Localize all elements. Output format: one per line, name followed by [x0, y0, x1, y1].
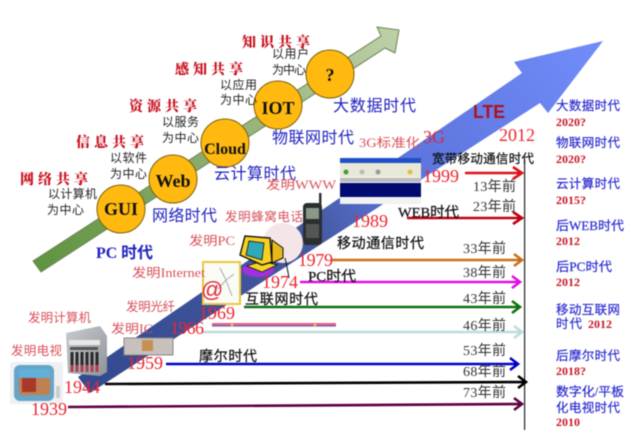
- year labels: 3G: [423, 127, 445, 147]
- timeline arrows: [68, 167, 526, 410]
- year labels: LTE: [473, 102, 505, 122]
- era names: PC时代: [308, 269, 356, 285]
- icon: television: [10, 362, 63, 404]
- years-ago labels: 73年前: [463, 384, 506, 401]
- blue era labels on the green arrow: [96, 97, 416, 262]
- blue era labels on the green arrow: 物联网时代: [272, 129, 354, 147]
- green sharing evolution arrow: [33, 27, 399, 272]
- year labels: 1939: [31, 399, 67, 419]
- year labels: 1969: [199, 303, 235, 323]
- node: Web: Web: [155, 171, 191, 191]
- era names: [199, 151, 534, 365]
- arrow: web era: [407, 212, 522, 224]
- invention labels: 发明光纤: [126, 299, 175, 314]
- icon: browser window: [340, 158, 421, 204]
- arrow: television era: [68, 398, 522, 410]
- invention labels: 发明电视: [11, 343, 62, 358]
- IC era bar: [212, 323, 336, 327]
- era names: 宽带移动通信时代: [432, 151, 534, 166]
- node: Cloud: Cloud: [204, 141, 246, 158]
- right column: future eras: 2012: [556, 275, 580, 289]
- years-ago labels: 46年前: [463, 317, 506, 334]
- sharing stage labels: 资源共享: [129, 98, 197, 115]
- years-ago labels: 68年前: [463, 363, 506, 380]
- era names: 摩尔时代: [199, 348, 257, 365]
- right column: future eras: 物联网时代: [556, 136, 620, 150]
- years-ago labels: 23年前: [473, 198, 516, 215]
- node: GUI: [97, 185, 145, 233]
- year labels: 1944: [64, 377, 100, 397]
- centre-of-focus labels: 以服务: [162, 114, 199, 129]
- centre-of-focus labels: 以软件: [110, 151, 147, 165]
- year labels: 1979: [298, 250, 333, 270]
- invention labels: 发明PC: [189, 233, 235, 248]
- node: GUI: GUI: [104, 199, 138, 219]
- icon: internet diagram: @: [201, 277, 223, 302]
- right column: future eras: 2012: [556, 234, 580, 248]
- node: question mark: [306, 50, 354, 98]
- invention labels: 发明WWW: [266, 177, 336, 192]
- icon: mobile phone: [303, 193, 322, 245]
- right column: future eras: 化电视时代: [556, 400, 620, 415]
- icon: IC chip: [124, 338, 173, 355]
- right column: future eras: 云计算时代: [556, 176, 620, 191]
- arrow: broadband: [465, 167, 522, 179]
- right column: future eras: 2010: [556, 415, 580, 429]
- sharing stage labels: 信息共享: [76, 134, 144, 151]
- arrow: fibre era: [203, 326, 522, 338]
- node: question mark: ?: [326, 65, 334, 85]
- node: Cloud: [201, 119, 249, 167]
- icon: internet diagram: [201, 262, 240, 304]
- right column: future eras: 后WEB时代: [556, 219, 625, 233]
- sharing stage labels: 网络共享: [20, 171, 88, 188]
- years-ago labels: 33年前: [463, 240, 506, 257]
- node: IOT: IOT: [261, 98, 295, 118]
- arrow: computer era: [105, 376, 526, 388]
- arrow: mobile era: [332, 254, 522, 266]
- right column: future eras: 移动互联网: [556, 303, 620, 317]
- invention labels: 发明蜂窝电话: [225, 209, 303, 224]
- centre-of-focus labels: 为中心: [162, 130, 199, 145]
- centre-of-focus labels: 以用户: [272, 46, 309, 61]
- sharing stage labels: [20, 34, 310, 188]
- era names: 移动通信时代: [337, 236, 424, 252]
- years-ago labels: [463, 178, 516, 401]
- year labels: 1959: [127, 353, 163, 373]
- centre-of-focus labels: 为中心: [47, 202, 84, 217]
- centre-of-focus labels: 为中心: [110, 166, 147, 181]
- blue era labels on the green arrow: 云计算时代: [214, 164, 296, 183]
- right column: future eras: 2015?: [556, 193, 586, 207]
- year labels: 1966: [170, 318, 204, 338]
- year labels: [31, 102, 535, 419]
- era names: WEB时代: [398, 205, 459, 221]
- years-ago labels: 43年前: [463, 290, 506, 307]
- centre-of-focus labels: 为中心: [220, 92, 257, 107]
- blue era labels on the green arrow: PC 时代: [96, 244, 153, 262]
- node: IOT: [254, 81, 302, 129]
- centre-of-focus labels: [47, 46, 309, 217]
- node: Web: [149, 155, 197, 203]
- icon: PC monitor: [240, 223, 303, 278]
- invention labels: 3G标准化: [359, 136, 421, 150]
- time axis line: [524, 160, 525, 430]
- sharing stage labels: 知识共享: [242, 34, 310, 51]
- invention labels: 发明计算机: [28, 310, 91, 325]
- centre-of-focus labels: 为中心: [272, 62, 306, 77]
- blue era labels on the green arrow: 大数据时代: [333, 97, 416, 115]
- blue era labels on the green arrow: 网络时代: [152, 206, 217, 225]
- right column: future eras: [556, 98, 625, 429]
- right column: future eras: 数字化/平板: [556, 384, 625, 399]
- years-ago labels: 53年前: [463, 342, 506, 359]
- arrow: internet era: [244, 301, 520, 313]
- right column: future eras: 时代: [556, 317, 582, 331]
- year labels: 1974: [262, 272, 298, 292]
- big blue timeline arrow: [78, 41, 603, 393]
- right column: future eras: 后PC时代: [556, 260, 613, 274]
- invention labels: 发明IC: [111, 321, 153, 336]
- years-ago labels: 38年前: [463, 264, 506, 281]
- sharing stage labels: 感知共享: [175, 61, 243, 78]
- centre-of-focus labels: 以计算机: [48, 186, 97, 201]
- year labels: 2012: [499, 125, 535, 145]
- right column: future eras: 2012: [588, 317, 612, 331]
- years-ago labels: 13年前: [473, 178, 516, 195]
- icon: server computer: [66, 326, 107, 376]
- arrow: PC era: [300, 276, 520, 288]
- centre-of-focus labels: 以应用: [220, 77, 257, 92]
- year labels: 1989: [352, 211, 388, 231]
- invention labels: [11, 136, 421, 358]
- right column: future eras: 2018?: [556, 364, 586, 378]
- year labels: 1999: [423, 166, 459, 186]
- right column: future eras: 2020?: [556, 115, 586, 129]
- era names: 互联网时代: [245, 292, 318, 308]
- right column: future eras: 后摩尔时代: [556, 348, 620, 363]
- right column: future eras: 大数据时代: [556, 98, 620, 113]
- right column: future eras: 2020?: [556, 152, 586, 166]
- invention labels: 发明Internet: [132, 265, 206, 280]
- arrow: Moore era: [166, 358, 518, 370]
